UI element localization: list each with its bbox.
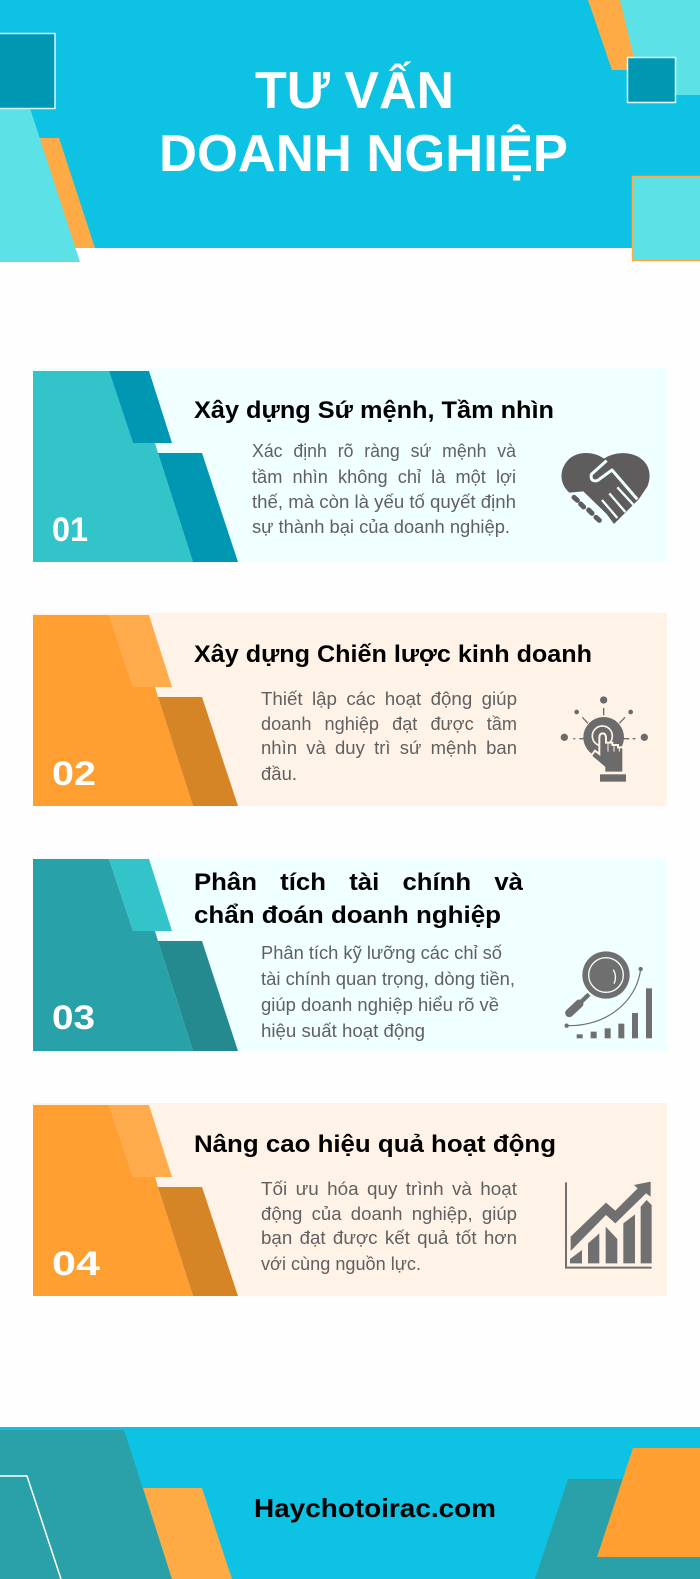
header left orange shape	[39, 138, 95, 248]
header right orange shape	[588, 0, 640, 70]
card 04 number: 04	[52, 1245, 100, 1283]
card 04 body text: với cùng nguồn lực.	[261, 1254, 421, 1274]
card 03 heading: Phân tích tài chính và	[194, 869, 524, 896]
footer website text: Haychotoirac.com	[254, 1493, 496, 1523]
card 04 body text: Tối ưu hóa quy trình và hoạt	[261, 1179, 517, 1199]
card 04 body text	[261, 1179, 517, 1274]
card 03 heading: chẩn đoán doanh nghiệp	[194, 902, 501, 929]
card 02 lower accent	[158, 697, 238, 806]
icon: magnifier and growth bars	[564, 951, 652, 1038]
card 01 background	[33, 368, 667, 562]
card 01 body text: Xác định rõ ràng sứ mệnh và	[252, 441, 517, 461]
header left light shape	[0, 108, 80, 262]
footer banner	[0, 1427, 700, 1579]
card 03 body text: giúp doanh nghiệp hiểu rõ về	[261, 995, 499, 1015]
card 02 main shape	[33, 615, 193, 806]
card 02 heading: Xây dựng Chiến lược kinh doanh	[194, 641, 592, 668]
card 03 lower accent	[158, 941, 238, 1051]
icon: handshake heart	[561, 453, 650, 524]
footer background	[0, 1427, 700, 1579]
card 01 body text: thế, mà còn là yếu tố quyết định	[252, 492, 516, 512]
footer left orange shape	[143, 1488, 232, 1579]
card 01 number: 01	[52, 511, 88, 549]
footer white outline	[0, 1476, 61, 1579]
card 01 heading: Xây dựng Sứ mệnh, Tầm nhìn	[194, 397, 554, 424]
title: DOANH NGHIỆP	[159, 124, 568, 183]
card 01 upper accent	[109, 371, 172, 443]
title: TƯ VẤN	[255, 61, 454, 120]
card 04 lower accent	[158, 1187, 238, 1296]
card 02 body text	[261, 689, 517, 784]
card 03 heading	[194, 869, 524, 929]
card 03 body text: hiệu suất hoạt động	[261, 1021, 425, 1041]
card 02 upper accent	[109, 615, 172, 687]
header right small square	[628, 58, 676, 102]
header right lower square	[632, 176, 700, 260]
card 03 upper accent	[109, 859, 172, 931]
header right light shape	[620, 0, 700, 95]
card 04 upper accent	[109, 1105, 172, 1177]
card 01 body text: tầm nhìn không chỉ là một lợi	[252, 467, 516, 487]
card 04 main shape	[33, 1105, 193, 1296]
card 04 body text: bạn đạt được kết quả tốt hơn	[261, 1228, 517, 1248]
card 04 body text: động của doanh nghiệp, giúp	[261, 1204, 517, 1224]
card 02 background	[33, 613, 667, 806]
title	[159, 61, 568, 183]
card 04 background	[33, 1103, 667, 1296]
header left square	[0, 34, 55, 108]
card 03 background	[33, 857, 667, 1051]
card 01 body text	[252, 441, 517, 537]
icon: touch idea	[561, 696, 648, 782]
card 02 body text: Thiết lập các hoạt động giúp	[261, 689, 517, 709]
card 01 lower accent	[158, 453, 238, 562]
card 02 body text: đầu.	[261, 764, 297, 784]
card 02 body text: nhìn và duy trì sứ mệnh ban	[261, 738, 517, 758]
card 04 heading: Nâng cao hiệu quả hoạt động	[194, 1131, 556, 1158]
panel: card 01	[33, 368, 667, 562]
card 02 body text: doanh nghiệp đạt được tầm	[261, 714, 517, 734]
footer left teal shape	[0, 1430, 172, 1579]
panel: card 02	[33, 613, 667, 806]
card 03 body text: Phân tích kỹ lưỡng các chỉ số	[261, 943, 502, 963]
card 01 body text: sự thành bại của doanh nghiệp.	[252, 517, 510, 537]
icon: rising bar chart	[565, 1182, 652, 1269]
card 02 number: 02	[52, 755, 96, 793]
header background	[0, 0, 700, 248]
card 03 body text: tài chính quan trọng, dòng tiền,	[261, 969, 515, 989]
panel: card 04	[33, 1103, 667, 1296]
card 03 number: 03	[52, 999, 95, 1037]
card 01 main shape	[33, 371, 193, 562]
card 03 main shape	[33, 859, 193, 1051]
header banner	[0, 0, 700, 262]
footer right orange shape	[597, 1448, 700, 1557]
card 03 body text	[261, 943, 515, 1041]
footer right teal shape	[535, 1479, 700, 1579]
panel: card 03	[33, 857, 667, 1051]
